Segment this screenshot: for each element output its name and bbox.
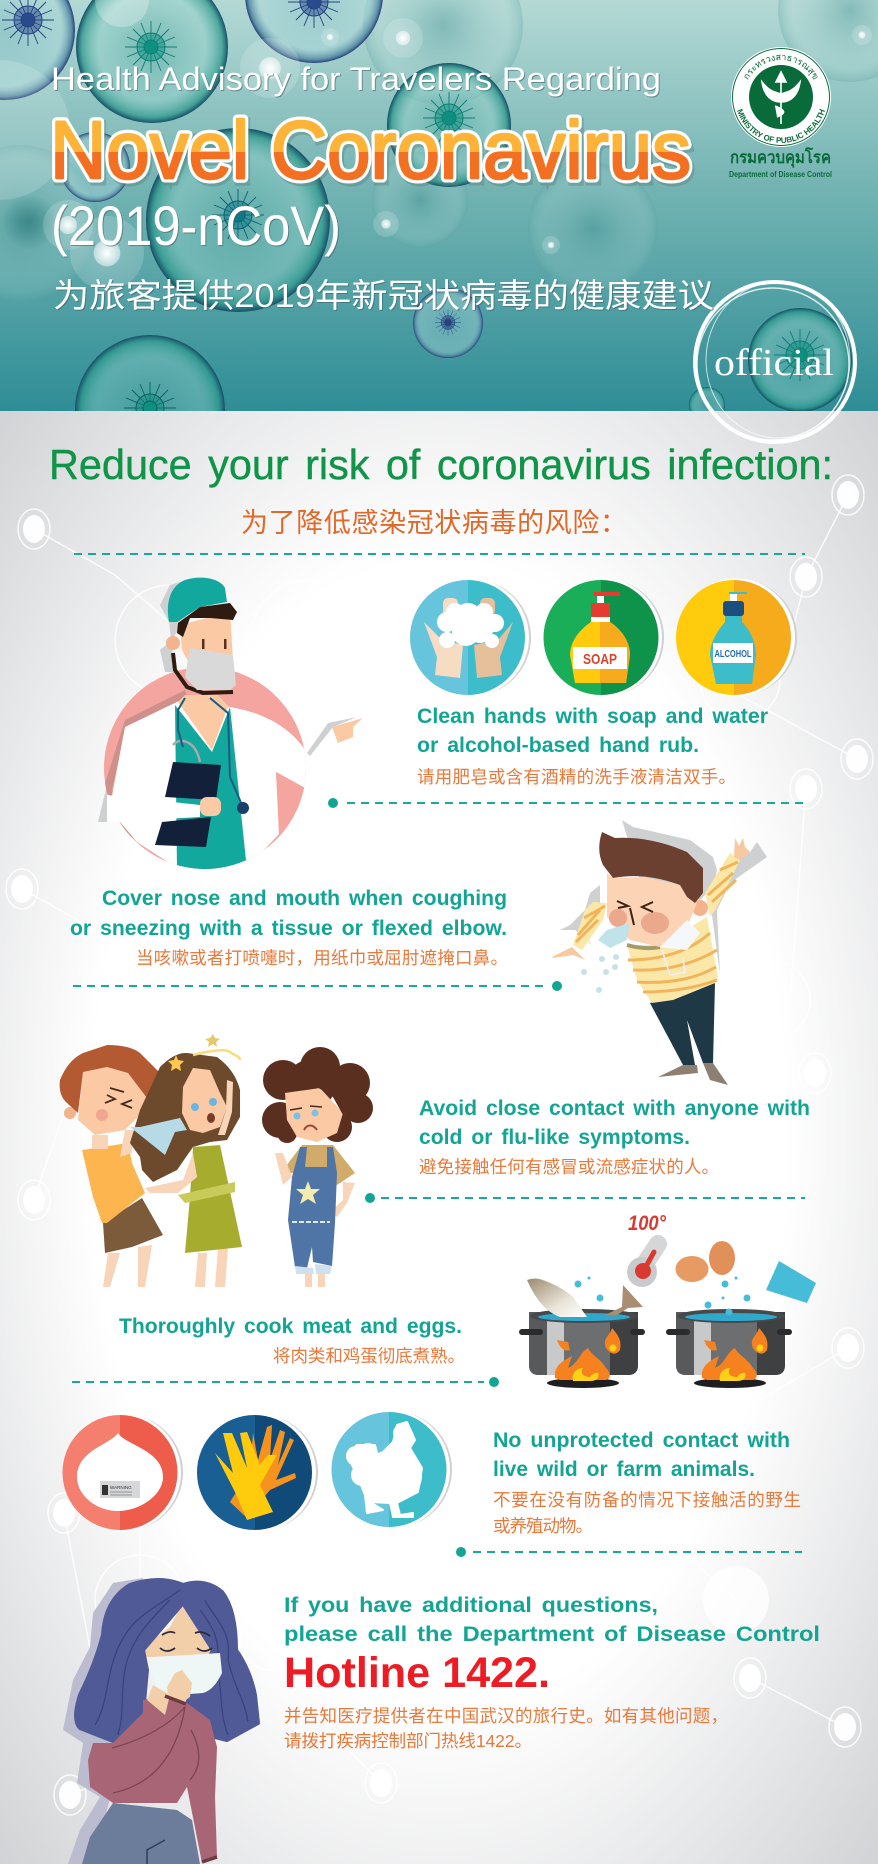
text: cover nose: Cover nose and mouth when coughing [102, 887, 507, 910]
illustration: cooking pots [519, 1212, 816, 1388]
third child [262, 1047, 373, 1287]
icon: face mask: WARNING [110, 1485, 132, 1490]
icon: ministry logo [731, 47, 831, 147]
illustration: doctor [98, 578, 363, 870]
icon: alcohol [676, 578, 797, 696]
illustration: woman with mask [63, 1578, 258, 1864]
text: clean hands: 请用肥皂或含有酒精的洗手液清洁双手。 [417, 767, 736, 787]
icon: eggs [676, 1241, 735, 1282]
text: cook meat [119, 1315, 465, 1366]
text: call the department: If you have additional questions, [284, 1594, 658, 1617]
boy [60, 1045, 163, 1287]
text: avoid close contact: cold or flu-like symptoms. [419, 1126, 690, 1149]
text: animal contact: No unprotected contact with [493, 1429, 790, 1452]
icon: thermometer [627, 1244, 658, 1287]
text: clean hands: Clean hands with soap and water [417, 705, 768, 728]
text: avoid close contact: Avoid close contact with anyone with [419, 1097, 810, 1120]
text: department name: กรมควบคุมโรค [730, 147, 831, 168]
text: department name [729, 147, 832, 179]
heading: health advisory line: Health Advisory for Travelers Regarding [51, 61, 661, 97]
text: cook meat: Thoroughly cook meat and eggs. [119, 1315, 462, 1338]
text: cover nose [70, 887, 508, 968]
virus cells background [0, 0, 878, 411]
text: cover nose: 当咳嗽或者打喷嚏时，用纸巾或屈肘遮掩口鼻。 [136, 948, 508, 968]
heading: Chinese reduce risk: 为了降低感染冠状病毒的风险： [241, 508, 627, 538]
text: department name: Department of Disease Control [729, 170, 832, 179]
text: animal contact: 不要在没有防备的情况下接触活的野生 [493, 1490, 801, 1510]
text: call the department [284, 1594, 820, 1646]
text: cook meat: 将肉类和鸡蛋彻底煮熟。 [273, 1346, 465, 1366]
official stamp rings [695, 282, 855, 442]
text: Chinese hotline note: 请拨打疾病控制部门热线1422。 [284, 1731, 532, 1751]
text: clean hands [417, 705, 768, 787]
icon: ministry logo: MINISTRY OF PUBLIC HEALTH [737, 108, 825, 143]
pot left [519, 1309, 645, 1388]
text: animal contact: live wild or farm animals. [493, 1458, 755, 1481]
icon: soap [543, 578, 664, 696]
icon: face mask [62, 1414, 183, 1532]
panel: header banner [0, 0, 878, 411]
text: clean hands: or alcohol-based hand rub. [417, 734, 699, 757]
text: animal contact: 或养殖动物。 [493, 1516, 593, 1536]
heading: reduce your risk: Reduce your risk of coronavirus infection: [49, 441, 833, 488]
heading: Chinese subtitle: 为旅客提供2019年新冠状病毒的健康建议 [53, 277, 714, 314]
title: Novel Coronavirus: Novel Coronavirus [50, 105, 691, 196]
label: 100 degrees: 100° [628, 1212, 667, 1235]
title: Novel Coronavirus: Novel Coronavirus [52, 108, 693, 199]
icon: blue lid [766, 1261, 816, 1303]
icon: chicken [331, 1410, 452, 1528]
icon: fish [527, 1278, 643, 1317]
icon: clean hands [410, 578, 531, 696]
icon: soap: SOAP [583, 651, 617, 668]
text: official label: official [714, 342, 834, 384]
girl [130, 1034, 242, 1287]
icon: gloves [197, 1414, 318, 1532]
text: cover nose: or sneezing with a tissue or flexed elbow. [70, 917, 507, 940]
text: call the department: please call the Department of Disease Control [284, 1623, 820, 1646]
illustration: three sick kids [60, 1034, 373, 1287]
illustration: sneezing boy [552, 820, 767, 1085]
icon: ministry logo: กระทรวงสาธารณสุข [744, 54, 818, 80]
text: Chinese hotline note [284, 1706, 728, 1751]
text: avoid close contact: 避免接触任何有感冒或流感症状的人。 [419, 1157, 719, 1177]
icon: alcohol: ALCOHOL [714, 649, 752, 660]
heading: 2019-nCoV: (2019-nCoV) [51, 194, 341, 257]
lower background [0, 411, 878, 1864]
text: avoid close contact [419, 1097, 810, 1177]
title: Novel Coronavirus: Novel Coronavirus [50, 105, 691, 196]
text: Chinese hotline note: 并告知医疗提供者在中国武汉的旅行史。如有其他问题， [284, 1706, 728, 1726]
text: animal contact [493, 1429, 801, 1536]
pot right [666, 1309, 792, 1388]
text: hotline: Hotline 1422. [284, 1649, 550, 1697]
